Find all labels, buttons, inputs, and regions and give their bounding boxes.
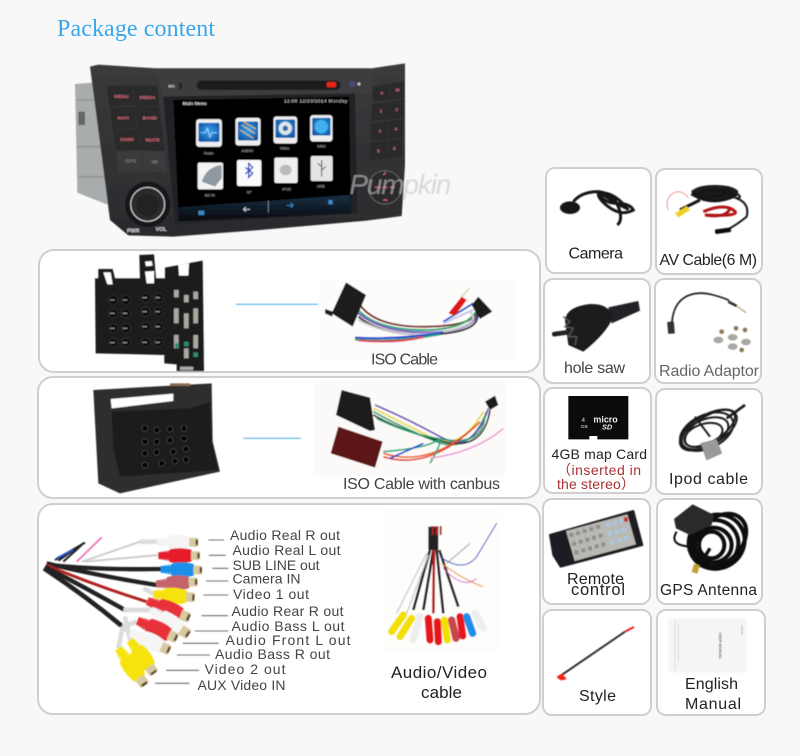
touch screen: Main Menu xyxy=(183,101,207,106)
panel: hole saw: hole saw xyxy=(564,360,625,377)
panel: camera xyxy=(546,168,651,273)
panel: English manual: USER MANUAL xyxy=(718,632,722,660)
panel: English manual xyxy=(657,610,765,715)
touch screen: BT xyxy=(247,190,252,194)
right preset buttons: A xyxy=(380,90,384,96)
port labels: Audio Real R out xyxy=(230,527,340,543)
right preset buttons: 2 xyxy=(395,107,398,113)
quadlock connector photo xyxy=(93,383,220,493)
right preset buttons: M xyxy=(395,88,399,94)
panel: radio adaptor: Radio Adaptor xyxy=(659,363,760,380)
port labels: Audio Bass R out xyxy=(215,646,330,662)
right preset buttons: 4 xyxy=(394,126,397,132)
port labels: Audio Front L out xyxy=(226,632,351,648)
panel: map card: micro xyxy=(593,414,618,424)
panel: stylus: Style xyxy=(579,688,616,705)
panel: map card: SD xyxy=(602,422,613,431)
panel: remote control: Remote xyxy=(567,571,624,588)
touch screen xyxy=(173,97,351,221)
ISO cable harness photo xyxy=(318,278,516,361)
connecting line xyxy=(236,303,318,306)
label: Audio/Video cable: Audio/Video xyxy=(391,663,487,682)
panel: AV cable: AV Cable(6 M) xyxy=(660,252,757,269)
title: Package content xyxy=(57,16,215,42)
touch screen: 12:00 12/23/2014 Monday xyxy=(284,98,348,103)
panel: stylus xyxy=(543,610,651,715)
disc slot: MIC xyxy=(168,85,175,89)
panel: hole saw xyxy=(544,279,650,383)
panel: English manual: Manual xyxy=(685,696,741,713)
head unit stereo photo xyxy=(75,63,451,237)
ISO connector photo xyxy=(95,254,204,371)
volume knob xyxy=(125,182,170,235)
left control buttons: SD xyxy=(151,159,159,165)
touch screen: iPOD xyxy=(282,187,291,191)
left control buttons: MUTE xyxy=(146,138,160,144)
left control buttons: NAVI xyxy=(117,115,129,121)
panel: GPS antenna: GPS Antenna xyxy=(660,582,757,599)
touch screen: USB xyxy=(317,184,325,188)
label: Audio/Video cable xyxy=(391,663,487,702)
left control buttons: MENU xyxy=(114,94,129,100)
right preset buttons xyxy=(368,81,404,204)
port labels xyxy=(198,527,351,693)
leader lines xyxy=(155,540,228,683)
right preset buttons: 6 xyxy=(393,146,396,152)
canbus harness photo xyxy=(313,382,505,477)
label: Audio/Video cable: cable xyxy=(421,683,462,702)
volume knob: PWR xyxy=(127,229,140,235)
panel: AV cable xyxy=(656,169,762,274)
disc slot xyxy=(168,81,360,90)
port labels: Camera IN xyxy=(232,570,300,586)
panel: ipod cable xyxy=(656,389,762,494)
port labels: Audio Real L out xyxy=(232,542,341,558)
panel: radio adaptor xyxy=(655,279,761,383)
port labels: Audio Bass L out xyxy=(232,618,345,634)
touch screen: Radio xyxy=(204,151,214,155)
panel: English manual: English xyxy=(685,676,738,693)
port labels: SUB LINE out xyxy=(232,557,320,573)
right preset buttons: 5 xyxy=(377,148,380,154)
left control buttons xyxy=(107,85,167,172)
touch screen: AD-IN xyxy=(205,193,215,197)
panel: audio video outputs xyxy=(38,504,540,714)
left control buttons: MEDIA xyxy=(139,95,156,101)
connecting line xyxy=(243,437,301,440)
label: ISO Cable with canbus: ISO Cable with canbus xyxy=(343,476,500,493)
panel: map card xyxy=(544,388,651,493)
left control buttons: GPS xyxy=(125,159,137,165)
RCA cable fan photo xyxy=(44,535,202,690)
right preset buttons: 1 xyxy=(380,109,383,115)
left control buttons: DIMM xyxy=(120,137,134,143)
panel: GPS antenna xyxy=(657,499,762,604)
touch screen: Video xyxy=(280,147,289,151)
panel: ISO cable xyxy=(39,250,540,372)
touch screen: NAVI xyxy=(317,145,326,149)
panel: remote control: control xyxy=(571,581,625,599)
watermark: Pumpkin: Pumpkin xyxy=(349,169,451,200)
panel: map card: 4GB map Card xyxy=(552,446,647,462)
audio video cable photo xyxy=(383,512,498,652)
label: ISO Cable: ISO Cable xyxy=(371,352,438,368)
panel: map card: （inserted in xyxy=(557,462,641,478)
panel: map card: GB xyxy=(581,424,589,430)
volume knob: VOL xyxy=(156,227,167,233)
port labels: Video 2 out xyxy=(204,661,286,677)
touch screen: AUDIO xyxy=(242,149,253,153)
panel: camera: Camera xyxy=(568,246,623,262)
port labels: Audio Rear R out xyxy=(232,603,344,619)
port labels: Video 1 out xyxy=(233,586,309,602)
panel: map card: 4 xyxy=(582,418,586,424)
left control buttons: BAND xyxy=(143,115,157,121)
panel: ipod cable: Ipod cable xyxy=(669,471,748,488)
panel: remote control xyxy=(543,499,650,604)
panel: ISO cable with canbus xyxy=(38,377,540,498)
panel: map card: the stereo） xyxy=(557,476,635,492)
right preset buttons: 3 xyxy=(378,128,381,134)
port labels: AUX Video IN xyxy=(198,677,286,693)
